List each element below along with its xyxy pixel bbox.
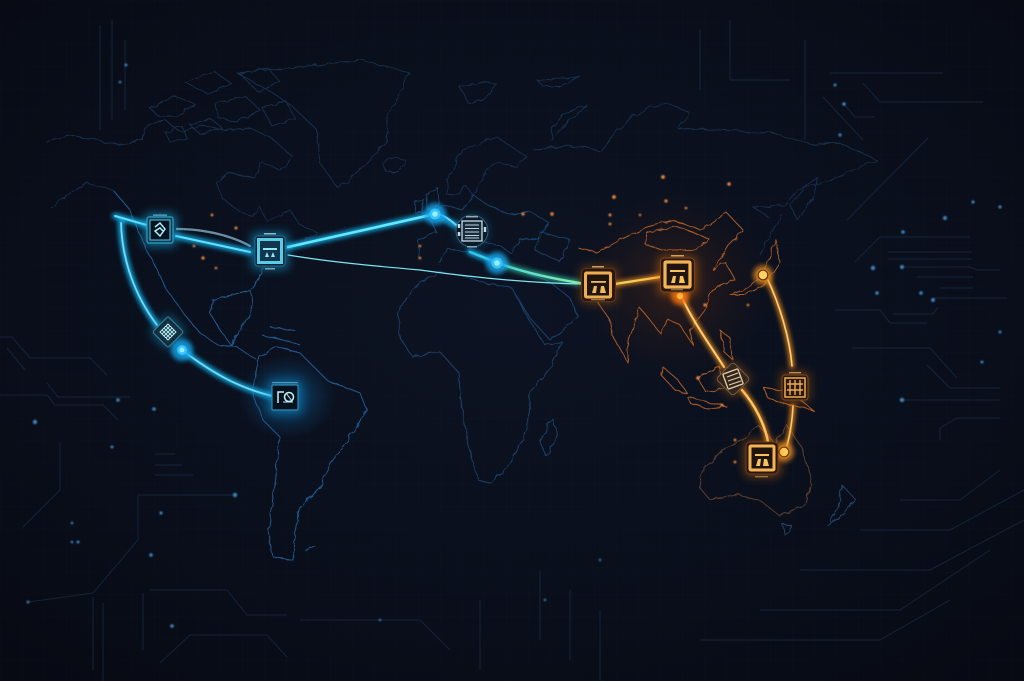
orange node icon: Southeast Asia diamond <box>715 361 751 397</box>
blue node icon: Pacific diamond <box>150 314 186 350</box>
Australia surroundings <box>782 485 856 536</box>
Europe and Africa coastlines <box>398 188 578 484</box>
blue node icon: South America <box>268 380 302 414</box>
glow node: South China <box>671 287 689 305</box>
glow node: Japan <box>753 265 773 285</box>
route: Middle East to China <box>615 277 660 284</box>
route: Japan to Pacific <box>767 278 792 366</box>
route: UK to Europe <box>435 214 456 225</box>
background node dots <box>27 64 1002 628</box>
route: dotted arc West Canada to US East <box>177 229 250 246</box>
route: Europe to Middle East <box>470 252 580 283</box>
route: US East to Middle East <box>288 255 582 284</box>
route: Alaska to West Canada <box>115 216 150 226</box>
glow node: Central America <box>171 339 193 361</box>
orange city lights <box>193 175 749 463</box>
blue node icon: US East <box>252 233 288 270</box>
faint northern coastlines <box>47 60 877 255</box>
route: China to Southeast Asia <box>681 296 724 367</box>
route network <box>115 214 793 452</box>
glow node: UK <box>424 203 446 225</box>
orange glow over Asia <box>575 190 775 380</box>
glow node: East Australia <box>774 442 794 462</box>
orange node icon: China <box>659 255 696 294</box>
orange node icon: Pacific <box>781 372 809 402</box>
brighter Americas coastlines <box>113 190 366 560</box>
orange node icon: Middle East <box>581 266 617 303</box>
route: Pacific to East Australia <box>785 406 793 452</box>
glow node: Mediterranean <box>486 252 508 274</box>
world map outlines <box>47 60 877 560</box>
route: Central America to South America <box>182 350 272 396</box>
route: US East to UK <box>288 214 435 247</box>
route: Southeast Asia to Australia <box>742 390 768 442</box>
route: West Canada to US East <box>176 236 250 252</box>
route: Alaska arc to Central America <box>121 223 157 325</box>
blue node icon: West Canada <box>144 214 176 246</box>
blue glow over South America node <box>239 355 335 439</box>
blue node icon: Europe <box>455 214 489 248</box>
teal route glow <box>498 263 580 283</box>
orange node icon: Australia <box>745 441 780 477</box>
orange route glow <box>615 277 793 452</box>
Asia coastlines in orange <box>577 213 813 516</box>
blue route glow <box>115 214 498 396</box>
